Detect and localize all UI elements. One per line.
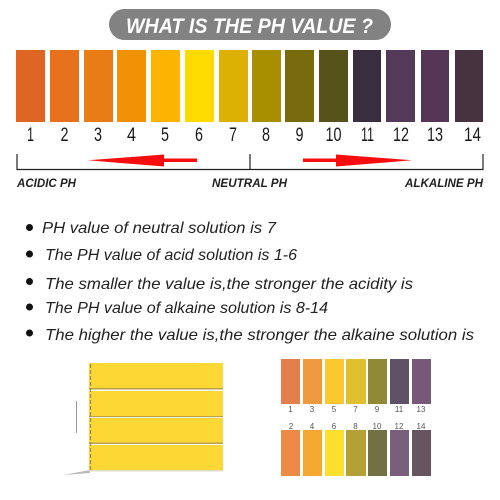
arrow: toward acidic xyxy=(88,154,197,166)
pH colour chart: even values: 6 xyxy=(332,422,337,431)
bullet list: The higher the value is,the stronger the alkaine solution is xyxy=(45,327,474,344)
pH colour chart: odd values: 9 xyxy=(375,405,380,414)
title: WHAT IS THE PH VALUE ? xyxy=(126,14,373,38)
pH colour chart: even values: 10 xyxy=(373,422,382,431)
bullet list: The PH value of alkaine solution is 8-14 xyxy=(45,300,328,317)
pH colour chart: odd values: 7 xyxy=(353,405,358,414)
pH colour chart: even values: 8 xyxy=(353,422,358,431)
scale labels xyxy=(16,178,484,190)
bullet list: The PH value of acid solution is 1-6 xyxy=(45,247,297,264)
pH colour chart: even values: 12 xyxy=(395,422,404,431)
bullet list: PH value of neutral solution is 7 xyxy=(42,220,277,237)
pH scale numbers: 13 xyxy=(427,125,443,146)
pH colour chart: odd values: 13 xyxy=(417,405,426,414)
pH colour chart: odd values xyxy=(281,359,431,414)
bullet list xyxy=(26,220,474,344)
pH scale numbers: 12 xyxy=(393,125,409,146)
pH scale numbers: 9 xyxy=(296,125,304,146)
pH scale numbers: 7 xyxy=(229,125,237,146)
scale bracket xyxy=(17,154,483,170)
pH colour chart: even values: 14 xyxy=(417,422,426,431)
pH scale numbers: 2 xyxy=(60,125,68,146)
pH scale numbers: 3 xyxy=(94,125,102,146)
scale labels: ALKALINE PH xyxy=(404,178,484,190)
pH scale numbers: 10 xyxy=(326,125,342,146)
scale labels: ACIDIC PH xyxy=(16,178,77,190)
bullet list: The smaller the value is,the stronger the acidity is xyxy=(45,276,413,293)
pH colour scale xyxy=(16,50,483,122)
pH colour chart: odd values: 5 xyxy=(332,405,337,414)
pH scale numbers xyxy=(27,125,481,146)
pH scale numbers: 4 xyxy=(127,125,136,146)
pH colour chart: odd values: 11 xyxy=(395,405,404,414)
pH colour chart: even values: 2 xyxy=(289,422,294,431)
pH scale numbers: 8 xyxy=(262,125,270,146)
scale labels: NEUTRAL PH xyxy=(212,178,288,190)
pH scale numbers: 14 xyxy=(464,125,481,146)
pH scale numbers: 1 xyxy=(27,125,34,146)
pH scale numbers: 5 xyxy=(161,125,169,146)
pH colour chart: even values: 4 xyxy=(310,422,315,431)
pH scale numbers: 11 xyxy=(361,125,374,146)
pH scale numbers: 6 xyxy=(195,125,203,146)
pH colour chart: even values xyxy=(281,422,431,476)
arrow: toward alkaline xyxy=(303,154,412,166)
pH test strip booklet xyxy=(63,363,223,475)
pH colour chart: odd values: 3 xyxy=(310,405,315,414)
pH colour chart: odd values: 1 xyxy=(288,405,293,414)
